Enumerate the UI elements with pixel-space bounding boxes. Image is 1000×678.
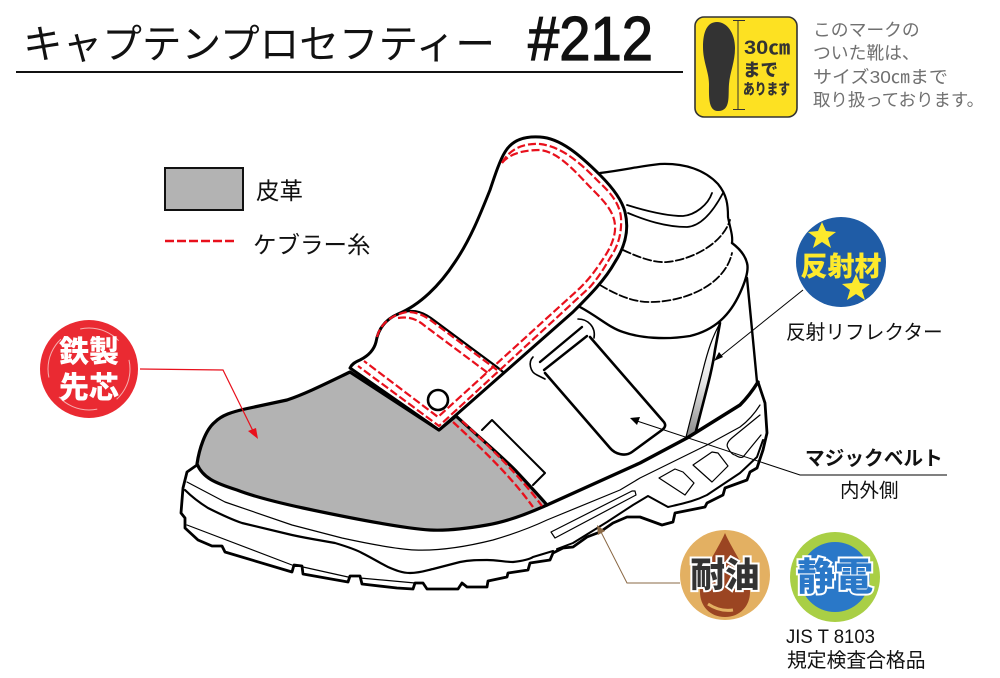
title: キャプテンプロセフティー <box>23 23 495 67</box>
title: #212 <box>528 5 653 74</box>
flap <box>350 137 627 430</box>
flap crease <box>400 311 503 372</box>
badge: steel toe cap: 鉄製 <box>59 336 119 369</box>
legend: ケブラー糸 <box>253 232 370 258</box>
icon: 30cm size mark: あります <box>743 81 790 98</box>
label: magic belt <box>805 448 943 502</box>
sole windows <box>551 415 761 538</box>
badge: antistatic: 静電 <box>797 557 873 599</box>
text block: size note: ついた靴は、 <box>813 43 920 63</box>
label: JIS standard: 規定検査合格品 <box>787 650 925 672</box>
text block: size note: このマークの <box>813 20 920 40</box>
text block: size note <box>813 20 984 110</box>
label: magic belt: 内外側 <box>840 480 899 502</box>
arrow: reflector leader <box>714 290 803 361</box>
reflector strip <box>686 323 720 437</box>
arrow: steel toe leader <box>140 369 258 439</box>
arrow: magic belt leader <box>630 417 947 475</box>
side stitching <box>453 421 542 507</box>
shoe illustration <box>181 137 767 589</box>
badge: reflector <box>796 217 886 307</box>
side patch <box>482 420 545 485</box>
title <box>16 5 683 74</box>
toe leather <box>197 372 547 530</box>
legend <box>165 168 370 258</box>
arrow: oil resistant leader <box>597 525 680 583</box>
kevlar stitching <box>358 144 621 426</box>
text block: size note: サイズ30㎝まで <box>813 67 948 87</box>
outsole tread <box>181 382 767 589</box>
label: magic belt: マジックベルト <box>805 448 943 470</box>
badge: steel toe cap: 先芯 <box>59 372 119 405</box>
eyelet <box>428 390 448 410</box>
text block: size note: 取り扱っております。 <box>813 90 984 110</box>
badge: antistatic <box>790 532 880 622</box>
icon: 30cm size mark <box>695 17 797 117</box>
icon: 30cm size mark: 30㎝ <box>744 38 790 59</box>
badge: oil resistant: 耐油 <box>690 557 760 595</box>
welt line <box>547 382 758 505</box>
collar and heel <box>580 164 757 382</box>
label: JIS standard <box>786 626 925 672</box>
badge: reflector: 反射材 <box>800 252 882 282</box>
label: JIS standard: JIS T 8103 <box>786 626 875 648</box>
badge: oil resistant <box>680 530 770 620</box>
icon: 30cm size mark: まで <box>743 60 778 80</box>
badge: steel toe cap <box>40 320 138 418</box>
midsole lines <box>185 405 763 583</box>
label: reflector: 反射リフレクター <box>786 322 943 344</box>
legend: 皮革 <box>256 178 303 204</box>
velcro belt <box>530 319 665 455</box>
